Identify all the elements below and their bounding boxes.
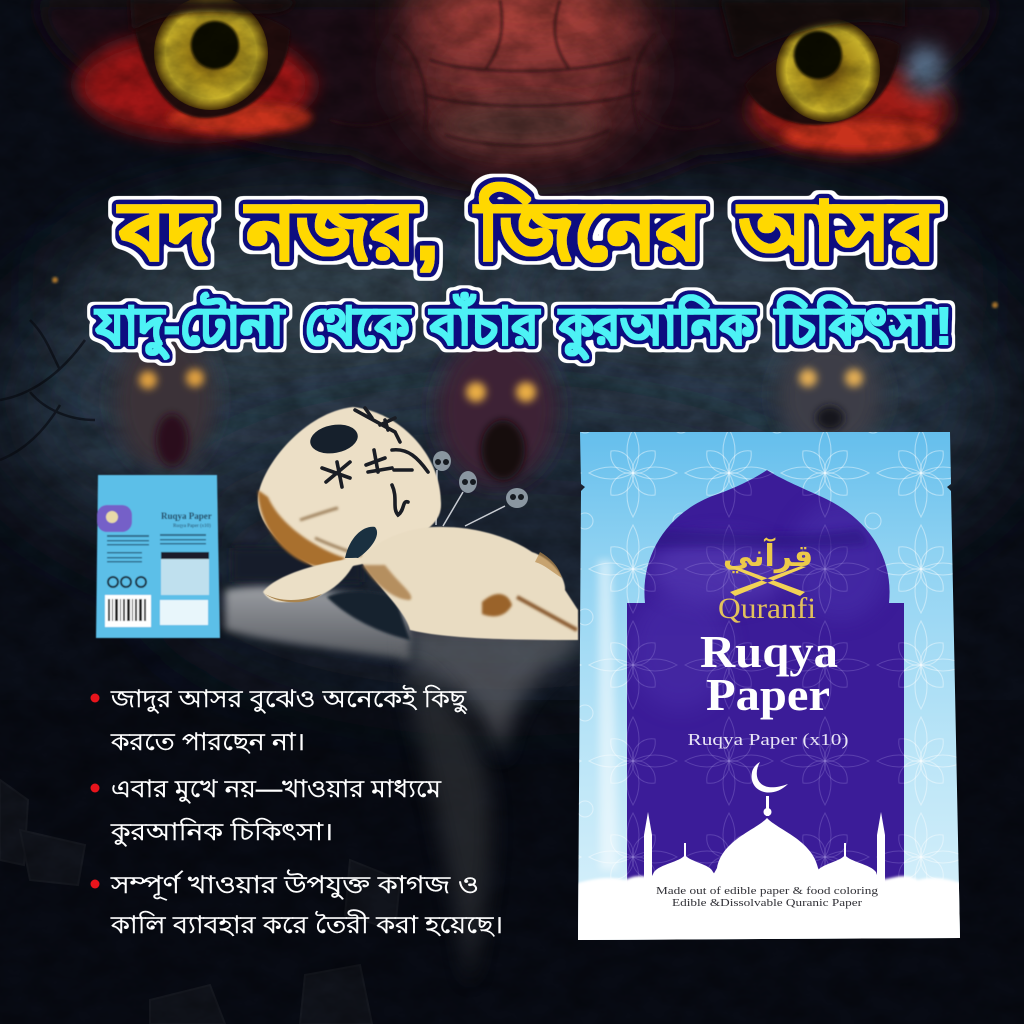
wrinkles: [330, 0, 720, 146]
bullet 3: কালি ব্যাবহার করে তৈরী করা হয়েছে।: [110, 910, 503, 939]
brand name: Quranfi: [718, 592, 816, 625]
face skin: [40, 0, 991, 195]
ghoul left: [115, 330, 215, 470]
left eye: [77, 0, 313, 137]
purple arch panel: [620, 465, 910, 890]
rune stones on ground: [0, 780, 400, 1024]
pins: [436, 470, 505, 526]
demonic face with red eyes: [40, 0, 991, 195]
small product pack: back side: Ruqya Paper: [161, 511, 212, 521]
product subtitle: Ruqya Paper (x10): [688, 730, 848, 749]
icon: crescent moon: [752, 762, 788, 793]
headline line 2: যাদু-টোনা থেকে বাঁচার কুরআনিক চিকিৎসা!: [94, 293, 952, 360]
large product pack: Ruqya Paper: [570, 425, 970, 948]
product title: Ruqya: [700, 627, 838, 677]
bullet 3: [90, 870, 503, 939]
headline line 1: বদ নজর, জিনের আসর: [117, 183, 939, 276]
product title: Paper: [706, 670, 830, 720]
logo: Quranfi calligraphy and crossed swords: قرآني: [723, 537, 813, 574]
headline: [94, 183, 952, 360]
arm: [263, 558, 357, 602]
pack bottom white area: [578, 874, 960, 940]
voodoo doll with skull pins: [225, 407, 578, 985]
small product pack: back side: Ruqya Paper (x10): [173, 524, 211, 529]
head: [258, 407, 441, 567]
neck shadow: [345, 527, 377, 558]
bullet 1: করতে পারছেন না।: [110, 729, 305, 756]
pack description: Made out of edible paper & food coloring: [656, 885, 879, 897]
product title: [700, 627, 838, 720]
dark table edge behind doll: [232, 548, 362, 582]
bullet 1: [90, 685, 468, 756]
mosque silhouette: [644, 796, 885, 886]
bullet list: [90, 685, 503, 939]
bullet 2: [90, 776, 442, 846]
stitches: [322, 408, 428, 515]
logo: Quranfi calligraphy and crossed swords: [723, 537, 813, 596]
skulls: [433, 451, 528, 508]
pack body with pattern: [570, 425, 970, 945]
ghoul figures with glowing eyes: [115, 330, 882, 485]
bullet 2: এবার মুখে নয়—খাওয়ার মাধ্যমে: [111, 776, 442, 803]
body and leg: [360, 527, 578, 640]
right eye: [720, 0, 950, 154]
pack description: [656, 885, 879, 909]
bullet 3: সম্পূর্ণ খাওয়ার উপযুক্ত কাগজ ও: [110, 870, 479, 900]
ghoul right: [778, 337, 882, 453]
bullet 2: কুরআনিক চিকিৎসা।: [110, 818, 333, 846]
bullet 1: জাদুর আসর বুঝেও অনেকেই কিছু: [110, 685, 468, 713]
small product pack: back side: [96, 475, 220, 638]
pack description: Edible &Dissolvable Quranic Paper: [672, 897, 862, 909]
ghoul centre: [437, 335, 557, 485]
cloth surface under doll: [225, 586, 410, 660]
bare branches on left: [0, 320, 95, 460]
